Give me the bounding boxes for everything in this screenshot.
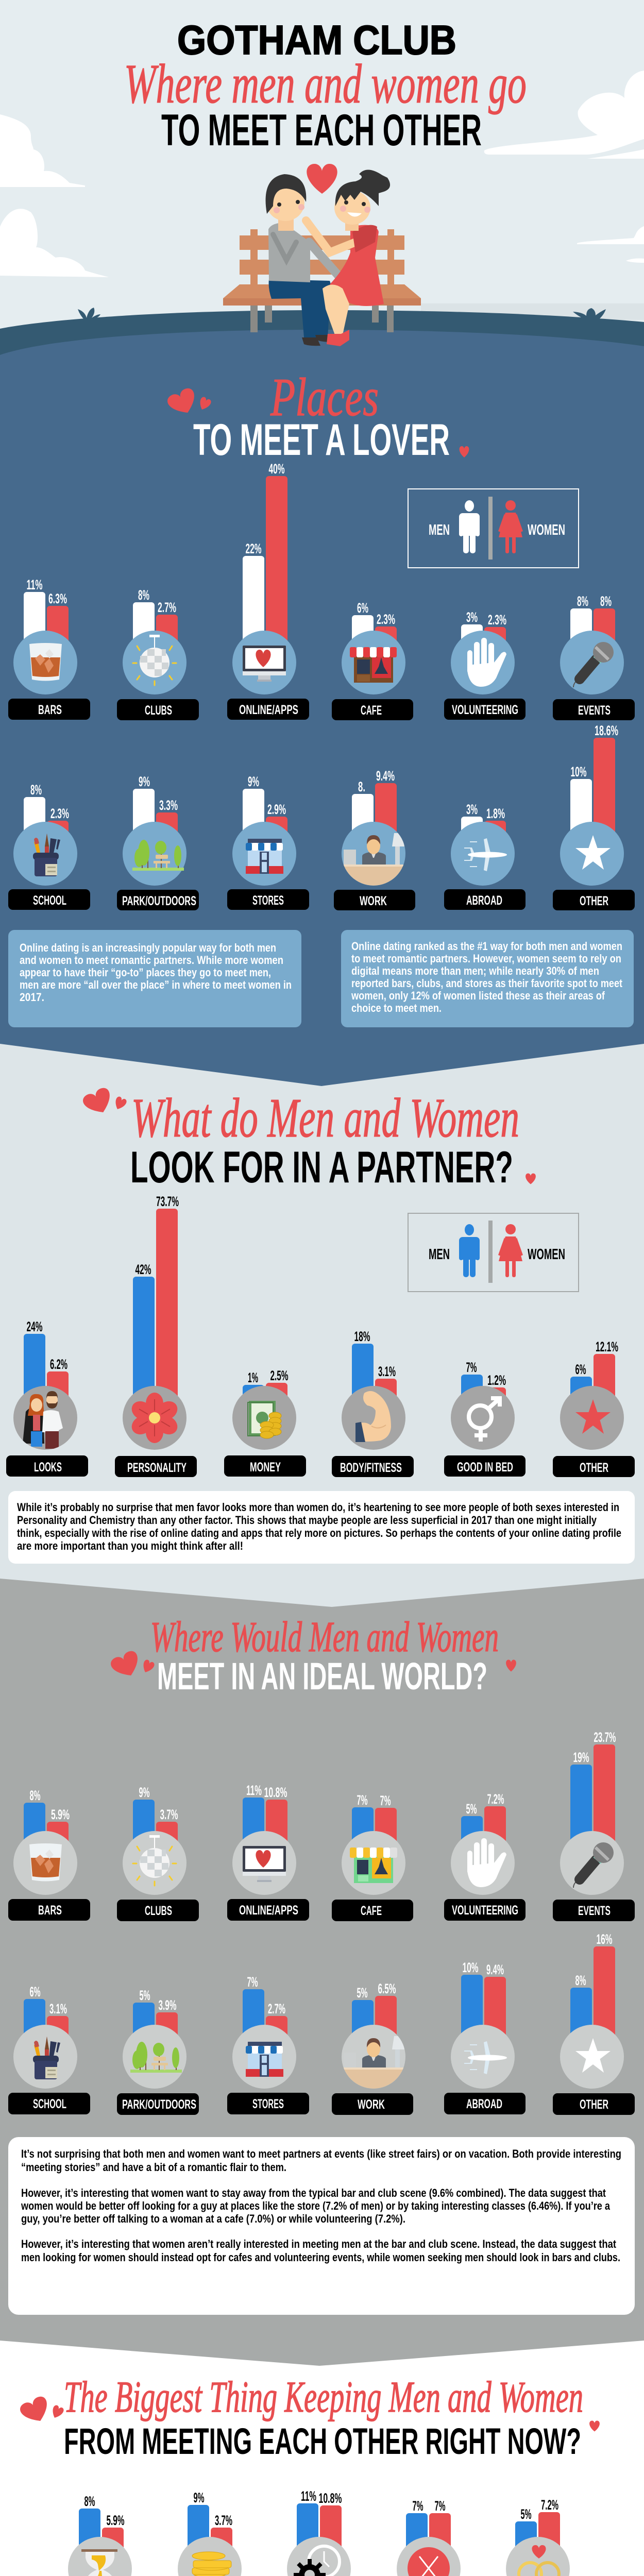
item: abroad: 10% (463, 1960, 478, 1975)
item: school: SCHOOL (33, 893, 66, 908)
item: fear of rejection (381, 2498, 477, 2576)
plant left (78, 308, 100, 320)
item: volunteering (444, 609, 526, 720)
chart: partner qualities (6, 1194, 635, 1477)
item: events (553, 594, 635, 720)
text panel: online dating left: appear to have their “go-to” places they go to meet men, (20, 966, 271, 979)
item: volunteering: VOLUNTEERING (452, 703, 518, 717)
item: abroad: ABROAD (466, 2097, 502, 2111)
item: park/outdoors (117, 774, 199, 910)
item: clubs: CLUBS (145, 1904, 172, 1918)
clouds (0, 71, 644, 277)
item: stores: STORES (252, 893, 284, 908)
item: school: 8% (30, 782, 42, 798)
text panel: online dating right (341, 930, 634, 1027)
item: school (8, 1984, 90, 2114)
item: park/outdoors: 9% (139, 774, 150, 789)
legend: men and women blue (408, 1213, 579, 1292)
item: events: 19% (573, 1750, 589, 1765)
item: clubs: 2.7% (158, 600, 176, 615)
item: other (553, 723, 635, 910)
item: abroad: ABROAD (466, 893, 502, 908)
item: looks (6, 1319, 88, 1477)
text panel: online dating left: 2017. (20, 991, 44, 1004)
item: work: 8. (358, 779, 365, 794)
item: online/apps: ONLINE/APPS (239, 703, 298, 717)
heart (307, 164, 337, 194)
text panel: partner commentary: are more important than you might think after all! (17, 1539, 243, 1552)
script heading: Places (270, 367, 379, 427)
woman (306, 170, 390, 346)
section background: ideal world (0, 1579, 644, 2366)
item: money (169, 2490, 250, 2576)
item: money: 9% (194, 2490, 204, 2505)
heart small (506, 1660, 516, 1671)
item: bars: 5.9% (51, 1807, 70, 1822)
item: stores: 7% (247, 1974, 258, 1990)
item: bars: 8% (30, 1788, 40, 1803)
man (266, 174, 352, 346)
item: school: 6% (30, 1984, 40, 1999)
item: events: 8% (577, 594, 588, 609)
item: abroad (444, 1960, 526, 2114)
section background: places (0, 330, 644, 1086)
item: other (553, 1339, 635, 1477)
item: looks: LOOKS (34, 1460, 62, 1475)
item: personality (115, 1194, 197, 1477)
item: clubs: 8% (138, 587, 149, 603)
item: abroad: 3% (466, 802, 478, 817)
hearts left (109, 1649, 156, 1681)
item: events: 8% (600, 594, 612, 609)
item: clubs (117, 587, 199, 720)
item: park/outdoors: 3.9% (159, 1997, 176, 2013)
item: clubs: CLUBS (145, 703, 172, 718)
section heading: ideal world (109, 1613, 516, 1698)
item: other: 10% (571, 764, 586, 779)
item: married/taken: 5% (520, 2506, 532, 2522)
item: events: EVENTS (578, 1904, 611, 1918)
item: stores: STORES (252, 2097, 284, 2111)
item: cafe: 2.3% (377, 612, 395, 627)
item: online/apps: 22% (245, 541, 262, 556)
item: volunteering (444, 1791, 526, 1921)
item: volunteering: 7.2% (487, 1791, 504, 1807)
logo: Gotham Club: GOTHAM CLUB (177, 17, 456, 63)
item: park/outdoors: PARK/OUTDOORS (122, 2097, 196, 2112)
item: bars: 11% (27, 577, 42, 592)
item: online/apps (227, 461, 309, 720)
section heading: biggest thing (18, 2372, 600, 2462)
hearts left (165, 386, 212, 418)
item: body/fitness: BODY/FITNESS (340, 1461, 402, 1475)
item: money: MONEY (250, 1460, 281, 1475)
sky background (0, 0, 644, 340)
item: online/apps: 40% (269, 461, 284, 477)
item: looks: 24% (27, 1319, 42, 1334)
hill: dark ridge (0, 310, 644, 361)
item: bars: 6.3% (48, 591, 67, 606)
item: work: WORK (358, 2097, 385, 2112)
item: abroad: 9.4% (486, 1962, 504, 1977)
item: married/taken: 7.2% (541, 2497, 558, 2513)
item: stores (227, 774, 309, 910)
item: good in bed: GOOD IN BED (457, 1460, 513, 1475)
heart small (526, 1174, 536, 1184)
chart: obstacles, row 1 (59, 2488, 581, 2576)
text panel: online dating right: choice to meet men. (351, 1002, 442, 1014)
item: work (332, 1981, 413, 2115)
item: bars: BARS (38, 703, 62, 717)
item: other (553, 1931, 635, 2115)
text panel: partner commentary (8, 1491, 635, 1564)
item: good in bed: 1.2% (487, 1372, 506, 1388)
text panel: ideal world commentary (8, 2137, 635, 2315)
item: other: 12.1% (596, 1339, 618, 1354)
item: clubs: 9% (139, 1785, 149, 1800)
plant right (573, 308, 606, 320)
item: bars (8, 1788, 90, 1921)
bold heading: TO MEET A LOVER (193, 415, 450, 465)
item: money: 2.5% (270, 1368, 289, 1383)
item: volunteering: VOLUNTEERING (452, 1903, 518, 1918)
item: time: 8% (84, 2494, 95, 2509)
item: married/taken (499, 2497, 581, 2576)
text panel: online dating left: Online dating is an increasingly popular way for both men (20, 941, 276, 954)
item: bars: BARS (38, 1903, 62, 1918)
item: online/apps: ONLINE/APPS (239, 1903, 298, 1918)
item: money: 3.7% (215, 2513, 232, 2528)
item: looks: 6.2% (50, 1357, 67, 1372)
chart: places, row 2 (8, 723, 635, 910)
heart small (460, 446, 469, 457)
chart: ideal world, row 1 (8, 1730, 635, 1921)
item: cafe (332, 600, 413, 720)
illustration: couple on a bench (223, 164, 421, 346)
item: park/outdoors: PARK/OUTDOORS (122, 894, 196, 908)
section background: partner (0, 1025, 644, 1613)
item: online/apps (227, 1783, 309, 1921)
item: park/outdoors: 5% (139, 1988, 150, 2003)
item: events (553, 1730, 635, 1921)
item: work: 5% (357, 1985, 368, 2001)
item: good in bed: 7% (466, 1360, 477, 1375)
item: money (224, 1368, 306, 1477)
item: other: OTHER (580, 894, 608, 908)
item: stores: 2.9% (267, 802, 286, 817)
hearts left (18, 2395, 65, 2427)
item: abroad (444, 802, 526, 910)
legend: men and women blue: WOMEN (528, 1246, 565, 1263)
item: other: 18.6% (595, 723, 618, 738)
item: time (59, 2494, 141, 2576)
item: money: 1% (248, 1370, 258, 1385)
item: other: 8% (575, 1973, 586, 1988)
item: school (8, 782, 90, 910)
item: cafe: 6% (357, 600, 368, 616)
item: events: 23.7% (594, 1730, 616, 1745)
item: school: SCHOOL (33, 2097, 66, 2111)
chart: ideal world, row 2 (8, 1931, 635, 2115)
item: abroad: 1.8% (486, 806, 505, 821)
item: age: 11% (301, 2488, 316, 2504)
item: volunteering: 3% (466, 609, 478, 625)
legend: men and women (408, 489, 579, 568)
section heading: places to meet a lover (165, 367, 469, 465)
item: clubs: 3.7% (160, 1807, 178, 1822)
item: body/fitness: 18% (354, 1329, 370, 1344)
item: fear of rejection: 7% (412, 2498, 423, 2514)
item: volunteering: 5% (466, 1801, 477, 1817)
item: other: 6% (575, 1362, 586, 1377)
item: personality: PERSONALITY (127, 1461, 187, 1475)
legend: men and women: MEN (429, 522, 450, 538)
item: cafe: 7% (380, 1793, 391, 1808)
text panel: online dating left: men are more “all over the place” in where to meet women in (20, 978, 292, 991)
item: age (279, 2488, 361, 2576)
item: other: 16% (597, 1931, 612, 1947)
item: personality: 73.7% (156, 1194, 179, 1209)
item: clubs (117, 1785, 199, 1921)
item: cafe: 7% (357, 1792, 368, 1808)
item: body/fitness (332, 1329, 414, 1477)
text panel: online dating left: and women to meet romantic partners. While more women (20, 954, 283, 967)
item: age: 10.8% (318, 2490, 342, 2506)
text panel: ideal world commentary: guy, you’re better off talking to a woman at a cafe (7.0%) or while volunteering (7.2%). (21, 2212, 405, 2225)
item: online/apps: 10.8% (264, 1785, 287, 1800)
item: body/fitness: 3.1% (378, 1364, 396, 1379)
item: time: 5.9% (106, 2513, 125, 2528)
item: other: OTHER (580, 2097, 608, 2112)
bench (223, 229, 421, 332)
chart: places, row 1 (8, 461, 635, 720)
item: volunteering: 2.3% (488, 612, 506, 628)
item: personality: 42% (135, 1262, 151, 1277)
item: stores: 9% (248, 774, 259, 789)
item: stores (227, 1974, 309, 2114)
item: bars (8, 577, 90, 720)
item: other: OTHER (580, 1461, 608, 1475)
legend: men and women blue: MEN (429, 1246, 450, 1263)
horizon band (421, 303, 644, 320)
heart small (589, 2420, 600, 2432)
item: online/apps: 11% (246, 1783, 262, 1798)
item: park/outdoors (117, 1988, 199, 2115)
item: park/outdoors: 3.3% (159, 798, 178, 813)
item: work: 6.5% (378, 1981, 396, 1996)
hearts left (81, 1086, 128, 1118)
item: stores: 2.7% (268, 2001, 285, 2016)
item: work: 9.4% (376, 768, 395, 784)
legend: men and women: WOMEN (528, 522, 565, 538)
item: school: 2.3% (50, 806, 69, 821)
text panel: ideal world commentary: “meeting stories” and have a bit of a romantic flair to them. (21, 2161, 286, 2174)
item: school: 3.1% (49, 2001, 67, 2016)
item: cafe: CAFE (361, 703, 382, 718)
item: work (334, 768, 415, 910)
item: cafe: CAFE (361, 1904, 382, 1918)
item: good in bed (444, 1360, 526, 1477)
item: work: WORK (360, 894, 387, 908)
item: fear of rejection: 7% (435, 2498, 445, 2514)
section heading: look for in a partner (81, 1086, 536, 1192)
text panel: online dating left (8, 930, 301, 1027)
item: events: EVENTS (578, 703, 611, 718)
text panel: online dating right: digital means more than men; while nearly 30% of men (351, 964, 599, 977)
item: cafe (332, 1792, 413, 1921)
